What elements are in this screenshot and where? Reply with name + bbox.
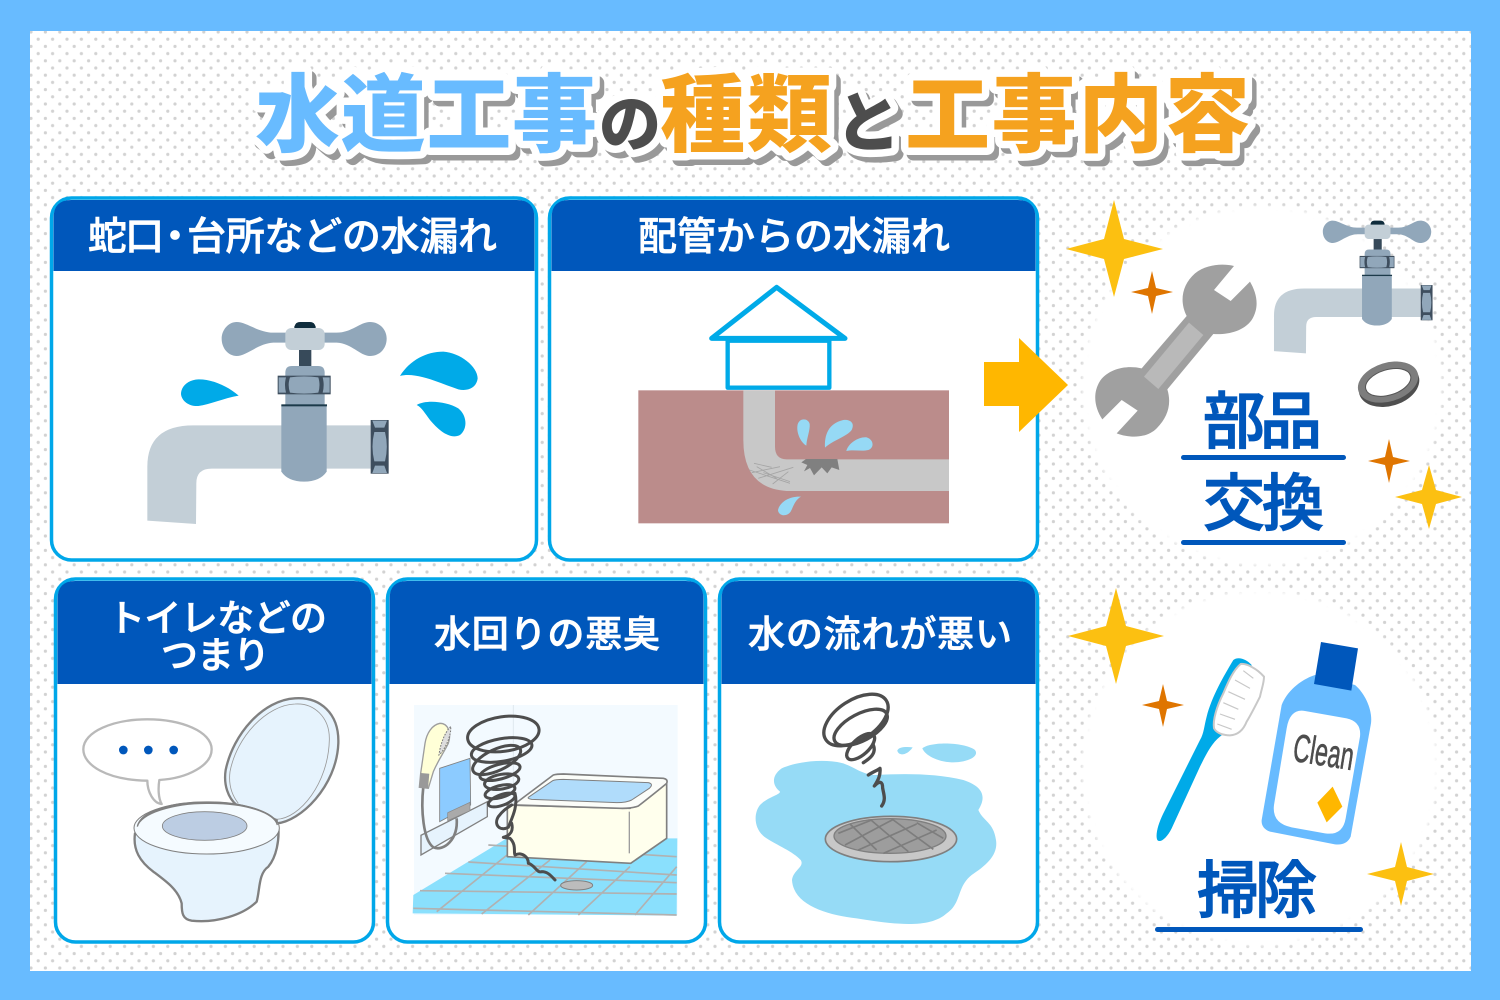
title: 種類 [660,69,832,164]
icon: toilet with speech bubble [83,698,338,921]
icon: house and underground pipe [638,287,949,523]
label: replacement: 交換 [1203,470,1324,539]
white circle [1082,590,1438,946]
icon: toothbrush [1157,658,1264,841]
header: faucet and kitchen leaks: 台所などの水漏れ [187,216,497,259]
title [255,69,1255,170]
sparkles [1068,588,1434,906]
header: faucet and kitchen leaks [54,200,534,271]
title: 工事内容 [905,69,1250,164]
header: toilet clogs [58,581,372,684]
title: 水道工事 [255,69,597,164]
icon: wrench [1095,265,1257,437]
underline [1181,540,1346,545]
panel: cleaning [1068,588,1438,946]
panel: pipe leaks [550,198,1038,560]
icon: flooded drain [756,684,996,924]
icon: cleaner bottle [1262,642,1371,845]
title: と [835,86,901,160]
icon: leaking faucet [147,322,478,524]
title: 水道工事 [255,69,597,164]
header: poor water flow: 水の流れが悪い [748,614,1012,655]
title: の [604,97,666,166]
underline [1155,927,1363,932]
underline [1181,455,1346,460]
sparkles [1066,200,1462,529]
arrow [984,338,1068,432]
title: と [835,86,901,160]
header: poor water flow [722,581,1036,684]
header: pipe leaks: 配管からの水漏れ [638,216,950,259]
header: toilet clogs: トイレなどの [108,598,327,639]
icon: bathroom with odour swirl [413,705,678,916]
header: faucet and kitchen leaks: ・ [156,216,195,259]
header: bad odours [390,581,704,684]
header: pipe leaks [552,200,1036,271]
panel: bad odours [388,579,706,942]
label: clean: Clean [1290,726,1357,779]
title: 工事内容 [905,69,1250,164]
title: 水道工事 [260,75,602,170]
label: cleaning: 掃除 [1197,857,1317,926]
panel: parts replacement [1066,200,1462,566]
panel: poor water flow [720,579,1038,942]
title: の [599,91,661,160]
panel: faucet and kitchen leaks [52,198,536,560]
title: 工事内容 [910,75,1255,170]
header: bad odours: 水回りの悪臭 [434,614,660,655]
icon: rubber gasket [1353,355,1425,414]
label: parts: 部品 [1203,388,1322,457]
icon: faucet [1274,221,1433,353]
white circle [1082,206,1442,566]
header: toilet clogs: つまり [161,635,270,676]
title: の [599,91,661,160]
title: と [840,92,906,166]
panel: toilet clogs [56,579,374,942]
title: 種類 [660,69,832,164]
title: 種類 [665,75,837,170]
header: faucet and kitchen leaks: 蛇口 [88,216,164,259]
